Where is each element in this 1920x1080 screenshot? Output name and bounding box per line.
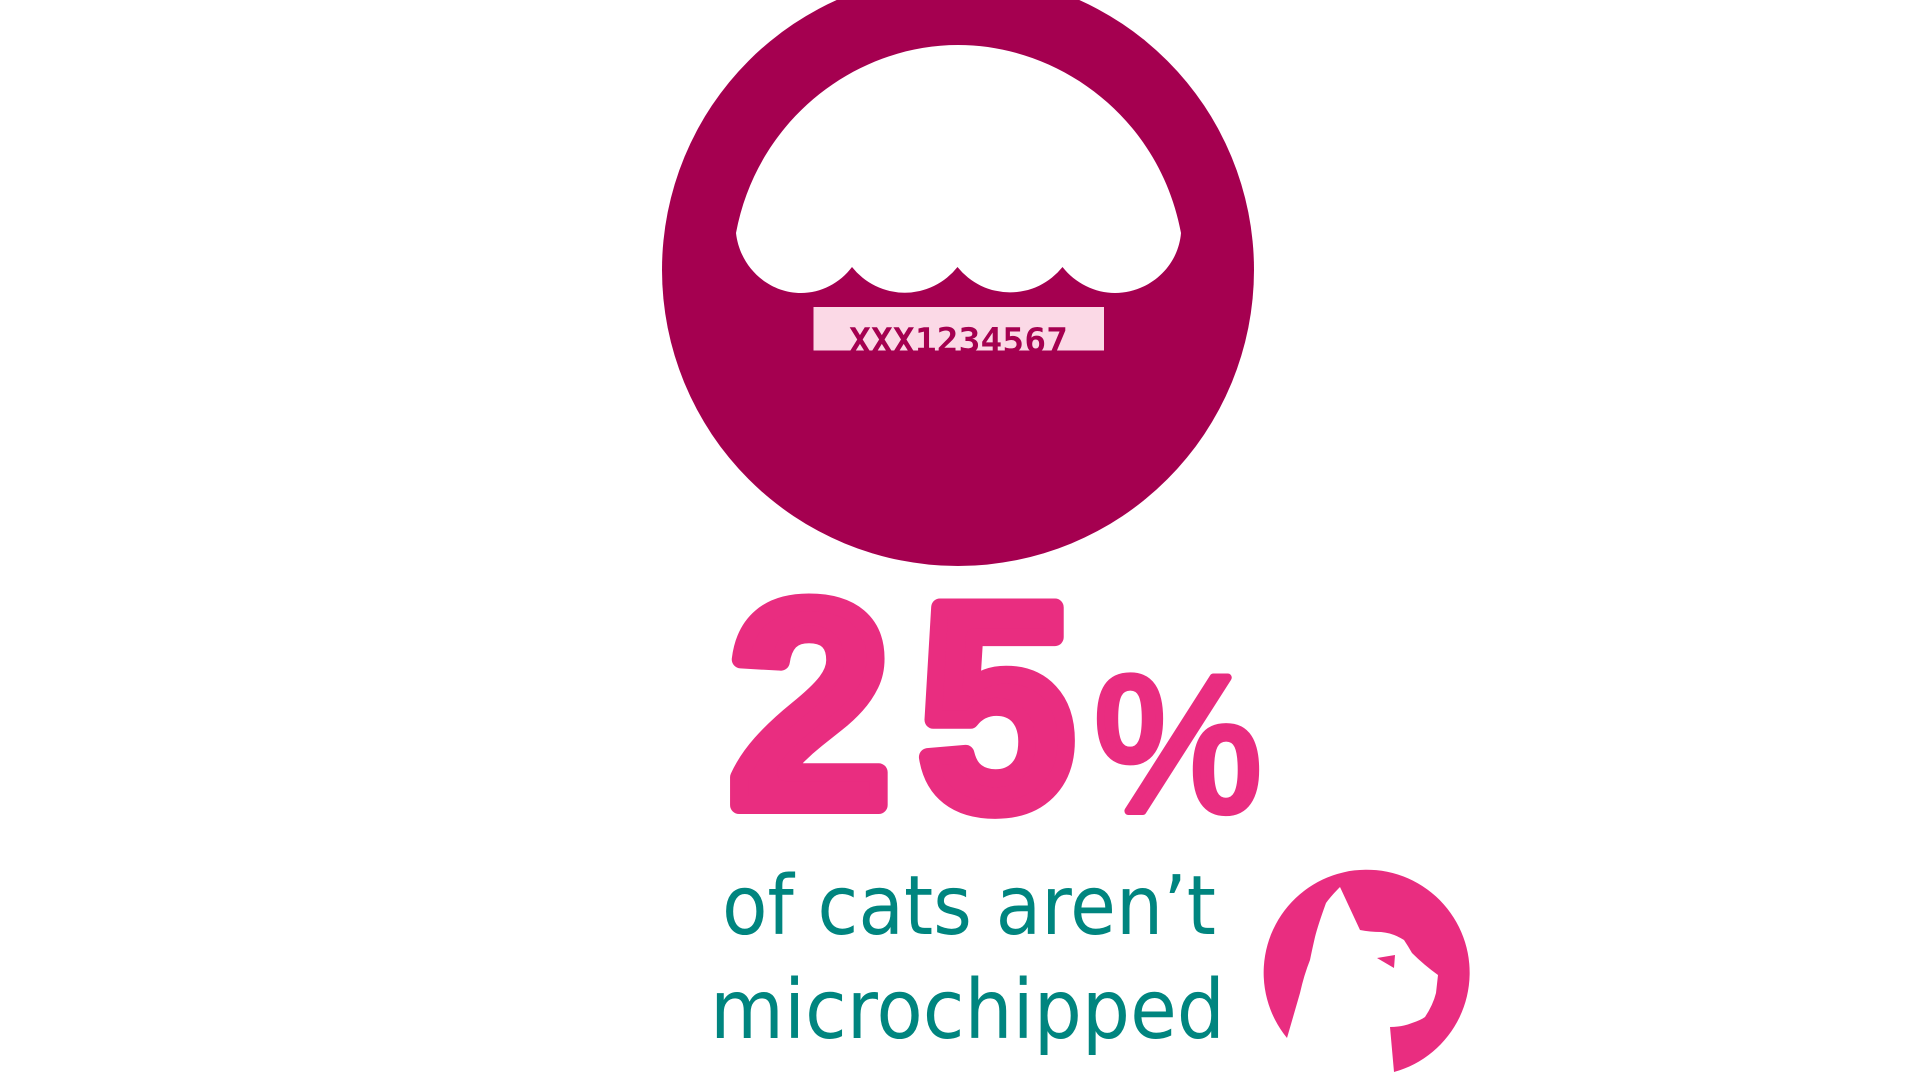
statistic: 25 percent: % [1094, 636, 1262, 853]
caption: of cats aren't microchipped: microchipped [710, 963, 1225, 1058]
caption: of cats aren't microchipped: of cats aren’t [722, 859, 1216, 954]
microchip number tag: XXX1234567 [849, 321, 1068, 361]
icon: cat silhouette in pink circle [1264, 870, 1470, 1072]
icon: white dome with scalloped edge [736, 45, 1181, 293]
statistic: 25 percent: 5 [919, 545, 1074, 869]
caption: of cats aren't microchipped [710, 859, 1225, 1058]
statistic: 25 percent: 2 [729, 543, 890, 867]
statistic: 25 percent [729, 543, 1262, 869]
icon: microchipped cat head in maroon circle [662, 0, 1254, 566]
cat eye [1377, 955, 1395, 968]
microchip number tag [814, 307, 1104, 361]
